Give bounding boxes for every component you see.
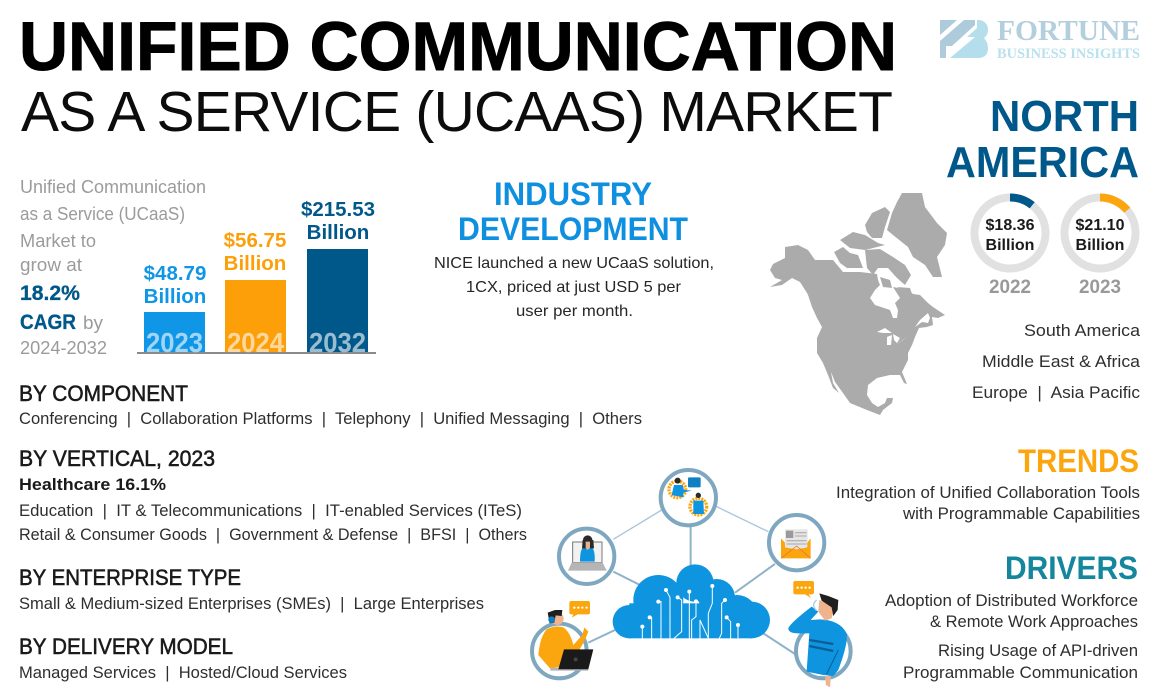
logo: Fortune Business Insights: BUSINESS INSIGHTS bbox=[997, 46, 1140, 62]
panel: by vertical: BY VERTICAL, 2023 bbox=[19, 446, 215, 471]
icon: support agent with laptop bbox=[532, 601, 593, 678]
text block: other regions: Middle East & Africa bbox=[982, 352, 1141, 371]
panel: drivers: DRIVERS bbox=[1005, 550, 1138, 586]
donut: 2022 value: 2022 bbox=[989, 277, 1031, 298]
panel: trends: with Programmable Capabilities bbox=[902, 504, 1140, 523]
heading: North America bbox=[946, 92, 1139, 187]
bar chart: market size: Billion bbox=[144, 285, 206, 308]
bar chart: market size: $48.79 bbox=[144, 262, 206, 285]
panel: by delivery model: BY DELIVERY MODEL bbox=[19, 634, 233, 659]
heading: North America: NORTH bbox=[990, 92, 1139, 141]
panel: trends bbox=[836, 443, 1140, 523]
panel: drivers: Rising Usage of API-driven bbox=[938, 641, 1138, 660]
text block: market growth summary: as a Service (UCaaS) bbox=[20, 204, 185, 224]
icon: email envelope bbox=[769, 515, 824, 570]
panel: industry development: DEVELOPMENT bbox=[458, 211, 688, 247]
text block: other regions bbox=[972, 321, 1141, 402]
heading: North America: AMERICA bbox=[946, 138, 1139, 187]
donut: 2023 value: Billion bbox=[1076, 237, 1124, 254]
text block: market growth summary: Market to bbox=[20, 231, 96, 251]
panel: trends: TRENDS bbox=[1018, 443, 1139, 479]
panel: by component: BY COMPONENT bbox=[19, 381, 188, 406]
panel: drivers: Adoption of Distributed Workforce bbox=[885, 591, 1138, 610]
bar chart: market size: 2023 bbox=[146, 327, 203, 358]
icon: cloud with circuit lines bbox=[613, 564, 770, 638]
panel: industry development bbox=[434, 176, 714, 320]
text block: market growth summary: Unified Communication bbox=[20, 177, 206, 197]
panel: industry development: 1CX, priced at just USD 5 per bbox=[466, 279, 682, 296]
icon: team with gears bbox=[661, 470, 716, 525]
bar chart: market size: 2024 bbox=[227, 327, 284, 358]
bar chart: market size: Billion bbox=[224, 252, 286, 275]
donut: 2023 value bbox=[1064, 198, 1136, 298]
panel: by delivery model bbox=[19, 634, 347, 682]
panel: industry development: user per month. bbox=[516, 303, 633, 320]
panel: by component: Conferencing | Collaboration Platforms | Telephony | Unified Messaging | Others bbox=[19, 409, 642, 428]
text block: market growth summary: 2024-2032 bbox=[20, 338, 107, 358]
panel: by vertical: Education | IT & Telecommunications | IT-enabled Services (ITeS) bbox=[19, 501, 522, 520]
panel: drivers: & Remote Work Approaches bbox=[930, 612, 1138, 631]
text block: market growth summary: 18.2% bbox=[20, 282, 80, 305]
icon: map of North America bbox=[770, 193, 947, 415]
icon: woman on laptop bbox=[559, 529, 614, 584]
donut: 2022 value: $18.36 bbox=[986, 217, 1035, 234]
text block: market growth summary bbox=[20, 177, 206, 358]
title bbox=[19, 8, 897, 144]
panel: by enterprise type: BY ENTERPRISE TYPE bbox=[19, 565, 241, 590]
text block: other regions: South America bbox=[1024, 321, 1141, 340]
logo: Fortune Business Insights: FORTUNE bbox=[997, 15, 1140, 47]
panel: drivers bbox=[885, 550, 1138, 682]
bar chart: market size: 2032 bbox=[309, 327, 366, 358]
panel: trends: Integration of Unified Collaboration Tools bbox=[836, 483, 1140, 502]
bar chart: market size: $56.75 bbox=[224, 229, 286, 252]
icon: man on phone bbox=[788, 581, 851, 687]
panel: by vertical: Healthcare 16.1% bbox=[19, 475, 166, 494]
panel: industry development: NICE launched a new UCaaS solution, bbox=[434, 255, 714, 272]
text block: market growth summary: by bbox=[83, 313, 103, 333]
donut: 2022 value bbox=[974, 198, 1046, 298]
panel: by enterprise type bbox=[19, 565, 484, 613]
bar chart: market size: $215.53 bbox=[301, 198, 375, 221]
text block: market growth summary: CAGR bbox=[20, 311, 76, 334]
panel: drivers: Programmable Communication bbox=[903, 663, 1138, 682]
panel: by delivery model: Managed Services | Hosted/Cloud Services bbox=[19, 663, 347, 682]
title: AS A SERVICE (UCAAS) MARKET bbox=[21, 80, 893, 144]
panel: by vertical bbox=[19, 446, 527, 544]
text block: market growth summary: grow at bbox=[20, 255, 82, 275]
panel: by enterprise type: Small & Medium-sized Enterprises (SMEs) | Large Enterprises bbox=[19, 594, 484, 613]
bar chart: market size: Billion bbox=[307, 221, 369, 244]
text block: other regions: Europe | Asia Pacific bbox=[972, 383, 1140, 402]
panel: by vertical: Retail & Consumer Goods | Government & Defense | BFSI | Others bbox=[19, 525, 527, 544]
title: UNIFIED COMMUNICATION bbox=[19, 8, 897, 85]
logo: Fortune Business Insights bbox=[940, 15, 1140, 62]
illustration: cloud communication network bbox=[532, 470, 851, 687]
bar chart: market size bbox=[137, 198, 376, 358]
donut: 2022 value: Billion bbox=[986, 237, 1034, 254]
donut: 2023 value: 2023 bbox=[1079, 277, 1121, 298]
panel: industry development: INDUSTRY bbox=[494, 176, 652, 212]
panel: by component bbox=[19, 381, 642, 428]
donut: 2023 value: $21.10 bbox=[1076, 217, 1125, 234]
